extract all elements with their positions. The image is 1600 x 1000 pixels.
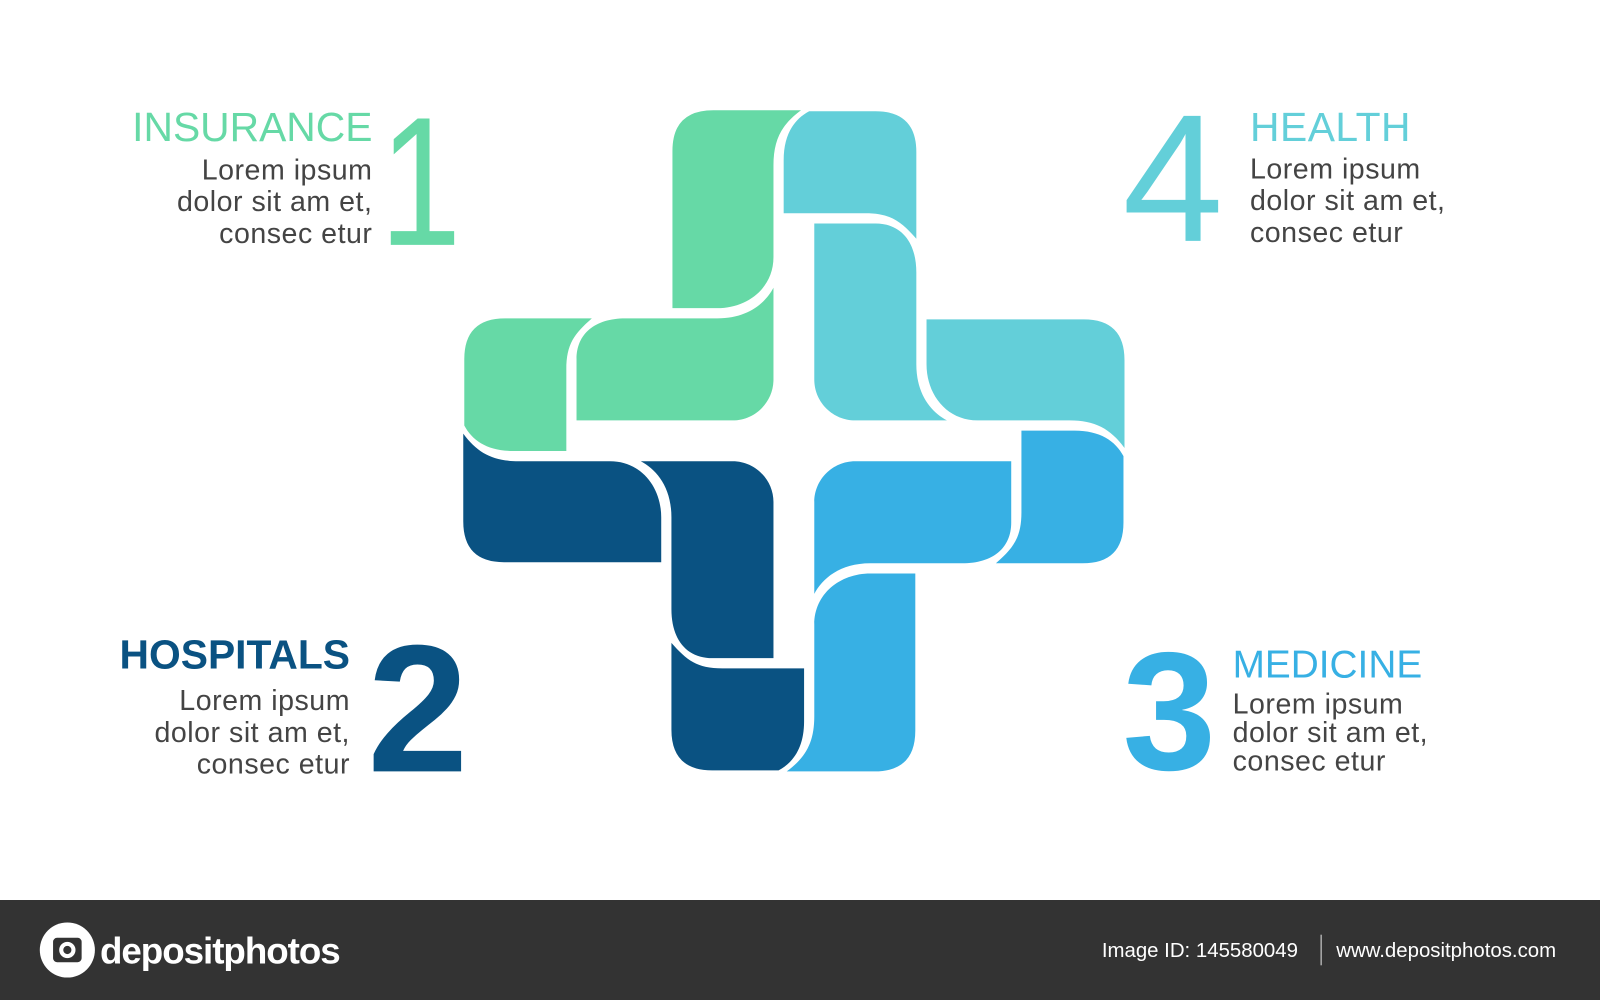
text block: insurance: dolor sit am et, (177, 186, 372, 218)
footer bar (0, 900, 1600, 1000)
text block: health (1250, 104, 1445, 249)
quadrant: health (teal) (784, 111, 1124, 448)
number 1: 1 (380, 79, 461, 285)
text block: hospitals: consec etur (197, 748, 350, 780)
number 3: 3 (1122, 617, 1216, 805)
text block: insurance (132, 104, 372, 250)
quadrant: insurance (green) (464, 110, 801, 451)
text block: insurance: consec etur (219, 218, 372, 250)
text block: insurance: Lorem ipsum (202, 155, 372, 187)
text block: health: dolor sit am et, (1250, 185, 1445, 217)
number 4: 4 (1122, 78, 1223, 280)
quadrant: hospitals (dark blue) (463, 434, 804, 770)
medical cross diagram (463, 110, 1124, 771)
text block: medicine: MEDICINE (1233, 644, 1422, 687)
text block: medicine: dolor sit am et, (1233, 717, 1428, 749)
text block: health: Lorem ipsum (1250, 154, 1421, 186)
text block: medicine: Lorem ipsum (1233, 688, 1403, 720)
icon: camera logo (40, 922, 95, 978)
text block: hospitals: Lorem ipsum (179, 685, 350, 717)
website: www.depositphotos.com (1335, 940, 1556, 962)
text block: hospitals: dolor sit am et, (155, 717, 350, 749)
logo text: depositphotos (100, 930, 340, 971)
text block: health: HEALTH (1250, 104, 1411, 150)
number 2: 2 (367, 608, 468, 810)
image id: Image ID: 145580049 (1102, 940, 1298, 962)
text block: hospitals (120, 631, 350, 780)
text block: insurance: INSURANCE (132, 104, 372, 150)
text block: medicine (1233, 644, 1428, 777)
text block: health: consec etur (1250, 217, 1403, 249)
text block: medicine: consec etur (1233, 745, 1386, 777)
quadrant: medicine (light blue) (787, 431, 1123, 771)
text block: hospitals: HOSPITALS (120, 631, 350, 677)
